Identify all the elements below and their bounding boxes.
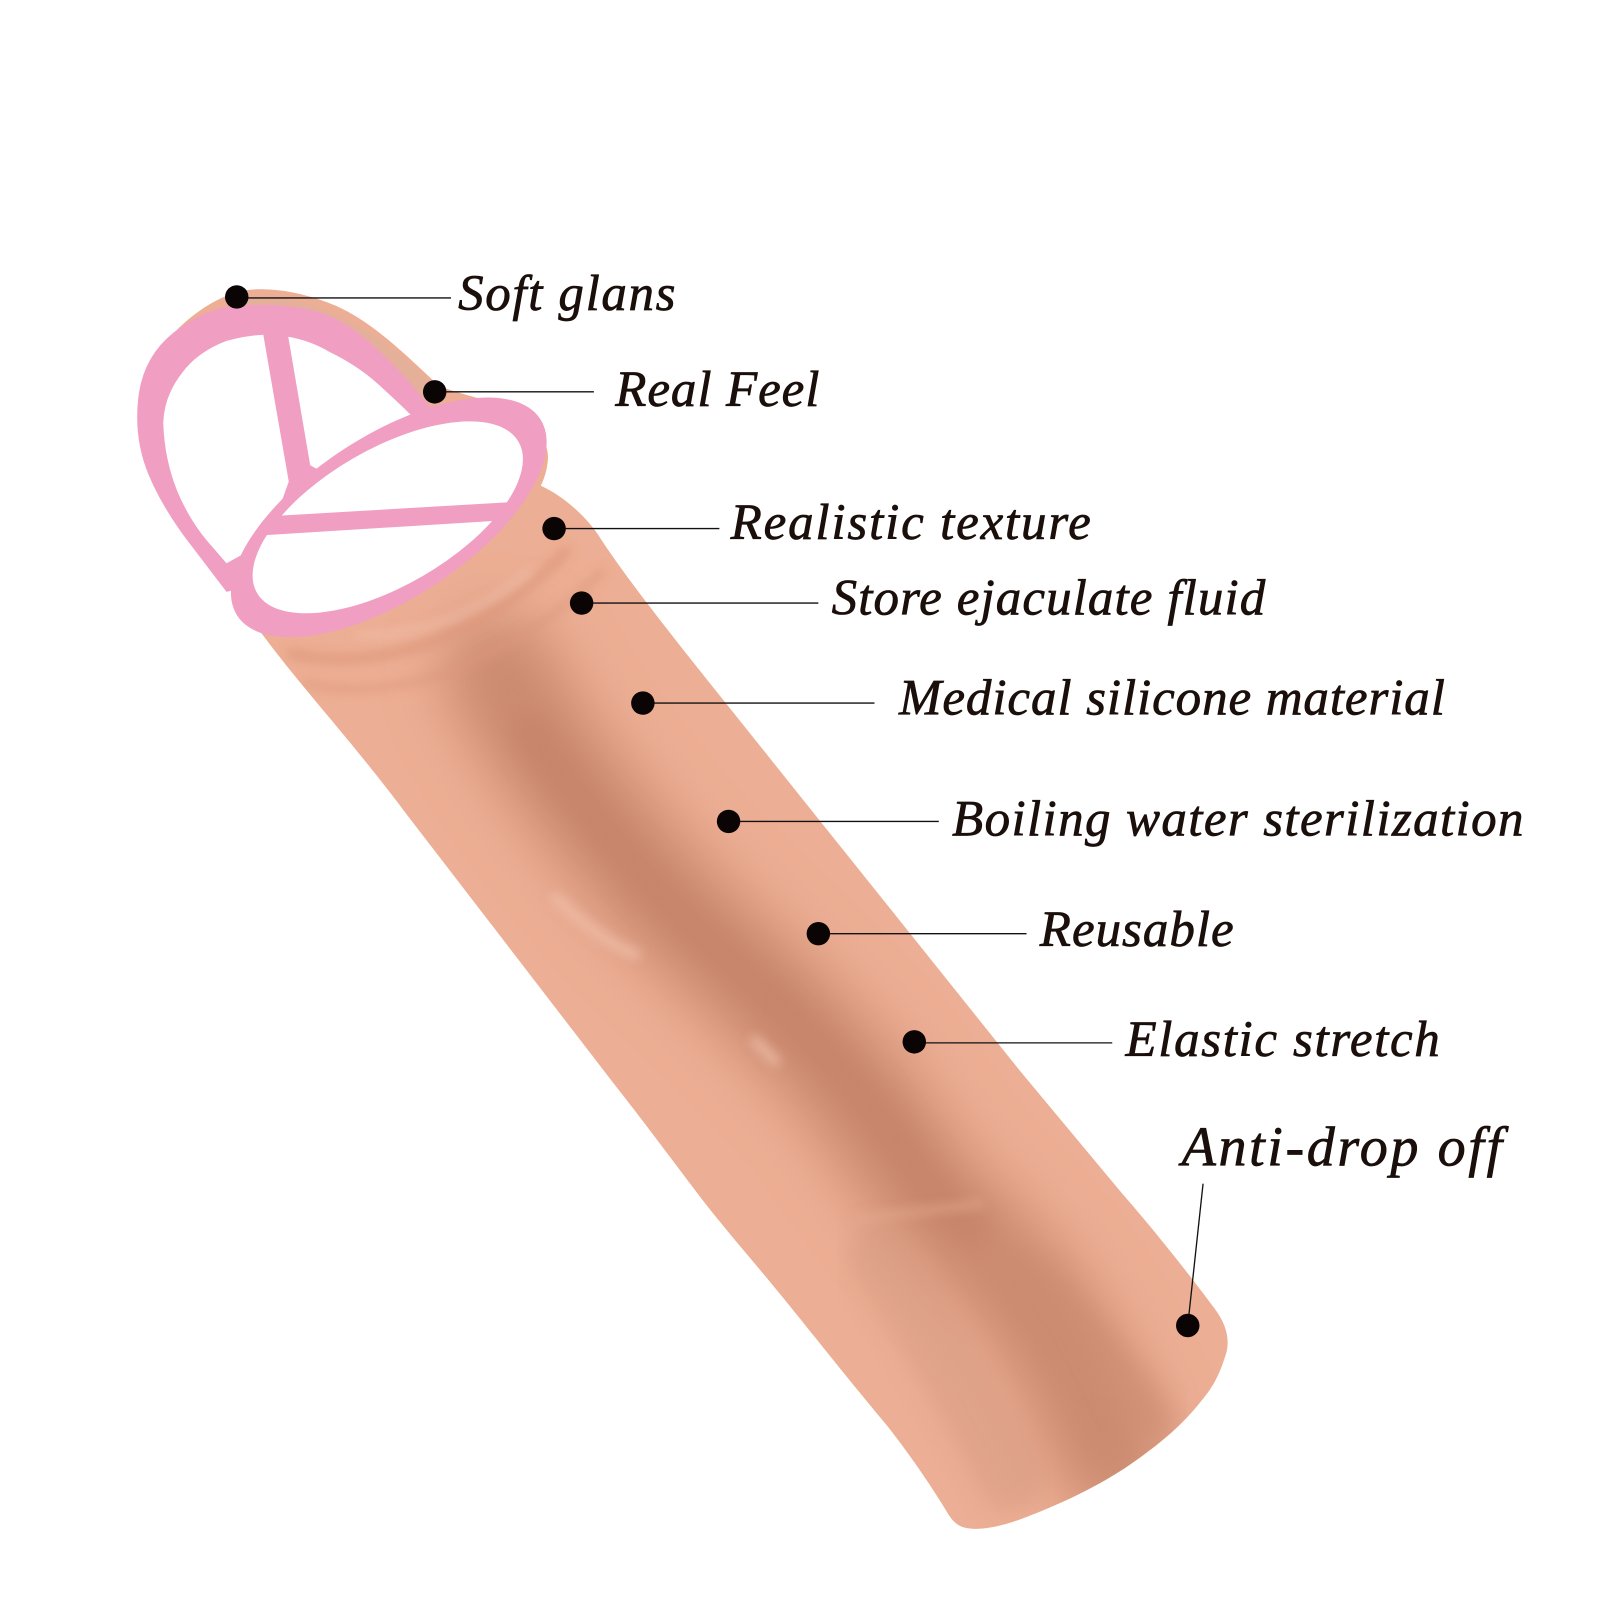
callout: Anti-drop off: Anti-drop off — [1178, 1116, 1509, 1178]
callout: Boiling water sterilization: Boiling water sterilization — [952, 792, 1523, 848]
callout: Anti-drop off — [1176, 1116, 1509, 1337]
callout: Soft glans: Soft glans — [458, 266, 676, 322]
callout: Medical silicone material — [631, 670, 1445, 726]
callout: Medical silicone material: Medical silicone material — [898, 670, 1445, 726]
product sleeve illustration — [153, 289, 1228, 1529]
neck wrinkles — [291, 551, 980, 1219]
callout: Store ejaculate fluid — [570, 570, 1266, 626]
sleeve body — [153, 289, 1228, 1529]
callout: Realistic texture — [542, 495, 1091, 551]
pink glans frame — [137, 305, 444, 592]
callout: Elastic stretch: Elastic stretch — [1125, 1012, 1440, 1068]
sleeve shading — [288, 548, 1186, 1506]
callout: Real Feel — [423, 362, 819, 418]
callout: Reusable — [807, 902, 1234, 958]
callout: Real Feel: Real Feel — [614, 362, 819, 418]
white oval opening — [223, 383, 553, 652]
left cut-out — [163, 335, 289, 563]
top cut-out — [288, 337, 429, 480]
callout: Elastic stretch — [903, 1012, 1440, 1068]
pink oval bar — [255, 502, 513, 536]
callout: Soft glans — [225, 266, 676, 322]
callout: Store ejaculate fluid: Store ejaculate fluid — [832, 570, 1266, 626]
callout: Realistic texture: Realistic texture — [730, 495, 1091, 551]
pink outline diagram — [137, 305, 585, 684]
callout: Reusable: Reusable — [1039, 902, 1234, 958]
pink oval frame — [193, 351, 585, 684]
